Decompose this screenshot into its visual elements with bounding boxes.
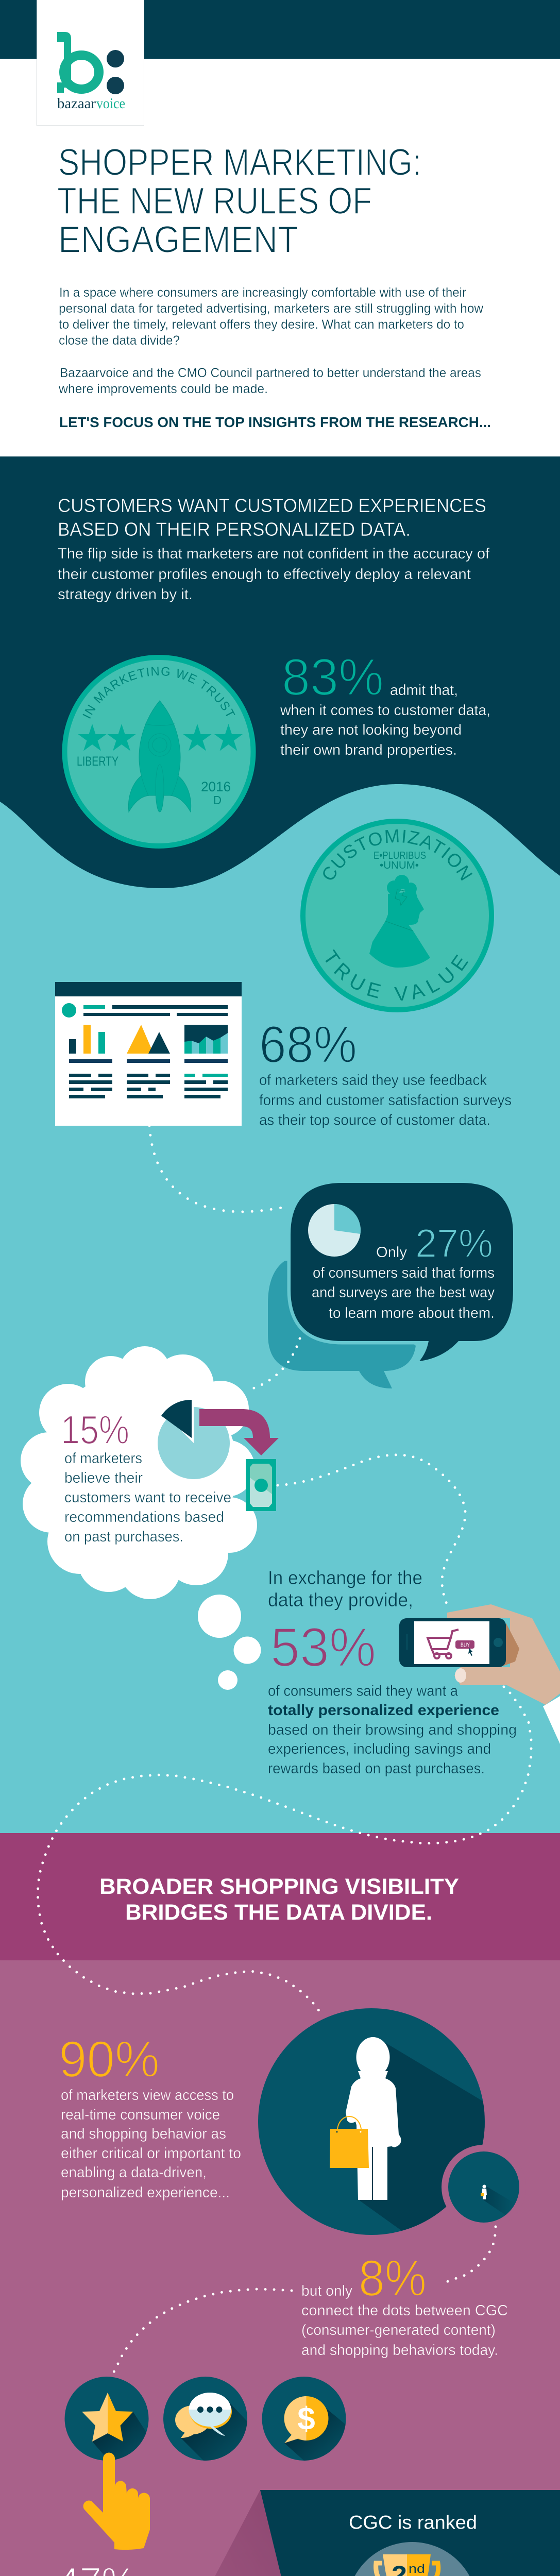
stat: 90%: [59, 2030, 241, 2201]
dotted connector: bubble to cloud: [246, 1338, 300, 1391]
icon: dollar circle: $: [297, 2401, 315, 2437]
icon: coin with rocket: IN MARKETING WE TRUST: [82, 667, 235, 719]
section intro text: their customer profiles enough to effectively deploy a relevant: [58, 566, 471, 583]
pie chart: 15%: [158, 1400, 230, 1479]
panel: purple lower section: [0, 1960, 560, 2576]
cloud puffs: [198, 1595, 261, 1690]
section heading: broader shopping visibility: BROADER SHOPPING VISIBILITY: [99, 1874, 459, 1899]
section heading: customized experiences: BASED ON THEIR PERSONALIZED DATA.: [58, 519, 411, 540]
dotted connector: 8% to star: [112, 2289, 292, 2375]
coin labels: [77, 754, 231, 807]
stat: 90%: either critical or important to: [61, 2145, 241, 2162]
stat: 53%: rewards based on past purchases.: [268, 1760, 485, 1777]
panel: dark section background: [0, 456, 560, 889]
title: ENGAGEMENT: [58, 219, 298, 261]
buy button: BUY: [461, 1641, 470, 1649]
hand: [447, 1604, 560, 1705]
stat: 15%: believe their: [64, 1470, 143, 1486]
stat: 53%: of consumers said they want a: [268, 1683, 459, 1699]
coin labels: LIBERTY: [77, 754, 118, 769]
stat: 8%: 8%: [359, 2249, 427, 2307]
section intro text: strategy driven by it.: [58, 586, 193, 603]
shopping bag: [330, 2116, 369, 2168]
icon: trophy in hand: [354, 2542, 470, 2576]
stat: 90%: 90%: [59, 2030, 160, 2088]
panel: purple heading band: [0, 1833, 560, 1960]
thumb nail: [455, 1668, 466, 1683]
panel: CGC is ranked: CGC is ranked: [349, 2512, 477, 2533]
title: [57, 142, 421, 261]
shopping cart: [428, 1630, 459, 1658]
stat: 53%: experiences, including savings and: [268, 1741, 491, 1757]
stat: 68%: as their top source of customer data.: [259, 1112, 490, 1128]
icon: large shopper circle: [258, 2008, 485, 2235]
shopper silhouette: [346, 2037, 401, 2200]
intro text: In a space where consumers are increasingly comfortable with use of their: [59, 285, 466, 300]
stat: 83%: 83%: [282, 649, 384, 706]
stat: 53%: based on their browsing and shopping: [268, 1722, 517, 1738]
stat: 8%: but only: [301, 2283, 352, 2299]
speech bubble: 27%: to learn more about them.: [329, 1305, 495, 1321]
icon: customization coin: E•PLURIBUS: [374, 850, 426, 861]
icon: trophy in hand: nd: [409, 2562, 425, 2576]
bust portrait: [369, 875, 430, 968]
section heading: broader shopping visibility: BRIDGES THE DATA DIVIDE.: [125, 1900, 432, 1925]
stat: 8%: [301, 2249, 508, 2359]
coin labels: 2016: [201, 779, 231, 794]
intro text: to deliver the timely, relevant offers they desire. What can marketers do to: [59, 317, 464, 332]
icon: bazaarvoice b mark: [57, 32, 124, 94]
stat: 53%: In exchange for the: [268, 1567, 422, 1588]
speech bubble: 27%: Only: [376, 1244, 407, 1261]
mini area chart: [184, 1025, 228, 1054]
logo wordmark: voice: [96, 96, 125, 112]
shirt cuff: [543, 1696, 560, 1744]
icon: customization coin: [300, 819, 494, 1012]
background: white page: [0, 0, 560, 456]
dotted connector: small circle to 8%: [440, 2227, 496, 2283]
intro text: personal data for targeted advertising, marketers are still struggling with how: [59, 301, 484, 316]
stat: 8%: and shopping behaviors today.: [301, 2342, 498, 2359]
icon: pointing hand: [83, 2452, 150, 2550]
stat: 83%: they are not looking beyond: [280, 722, 462, 738]
mini bar chart: [69, 1025, 105, 1054]
intro text: close the data divide?: [59, 333, 180, 348]
dotted connector: dashboard to bubble: [149, 1126, 289, 1212]
stat: 90%: enabling a data-driven,: [61, 2164, 207, 2181]
mini mountain chart: [127, 1025, 170, 1054]
pie chart: 27%: [308, 1204, 361, 1257]
stat: 15%: 15%: [61, 1407, 129, 1452]
logo wordmark: bazaar: [57, 96, 96, 112]
icon: star circle: [65, 2377, 149, 2461]
coin labels: D: [213, 793, 222, 807]
phone: [399, 1618, 506, 1667]
logo wordmark: [57, 96, 125, 112]
icon: customization coin: CUSTOMIZATION: [323, 829, 473, 881]
speech bubble: 27%: 27%: [415, 1221, 493, 1266]
icon: dollar circle: [262, 2377, 346, 2461]
stat: 83%: [280, 649, 490, 758]
icon: dollar bill: [246, 1459, 276, 1511]
stat: 53%: 53%: [270, 1616, 376, 1678]
arrow: wedge to money: [199, 1409, 279, 1455]
speech bubble: 27%: and surveys are the best way: [312, 1284, 495, 1301]
stat: 83%: their own brand properties.: [280, 742, 457, 758]
icon: customization coin: •UNUM•: [380, 860, 419, 871]
stat: 8%: (consumer-generated content): [301, 2322, 496, 2338]
stat: 90%: real-time consumer voice: [61, 2107, 220, 2123]
stat: 90%: of marketers view access to: [61, 2087, 234, 2104]
speech bubble: 27%: of consumers said that forms: [313, 1265, 495, 1281]
header band: [0, 0, 560, 59]
drop shadow behind CGC panel: [93, 2490, 560, 2576]
stat: 83%: when it comes to customer data,: [280, 702, 490, 719]
intro text: Bazaarvoice and the CMO Council partnered to better understand the areas: [60, 366, 481, 380]
stars: [78, 724, 243, 751]
dotted connector: bill to phone: [278, 1455, 465, 1608]
panel: CGC is ranked: [260, 2490, 560, 2576]
panel: light blue wave section: [0, 784, 560, 1833]
stat: 53%: [268, 1567, 517, 1777]
icon: coin with rocket: [62, 655, 256, 849]
thought cloud: [21, 1346, 261, 1690]
speech bubble: back: [268, 1261, 416, 1388]
intro callout: LET'S FOCUS ON THE TOP INSIGHTS FROM THE RESEARCH...: [59, 414, 491, 430]
stat: 8%: connect the dots between CGC: [301, 2302, 508, 2319]
stat: 90%: and shopping behavior as: [61, 2126, 226, 2142]
stat: 68%: of marketers said they use feedback: [259, 1072, 487, 1089]
stat: 15%: [61, 1407, 231, 1545]
stat: 90%: personalized experience...: [61, 2184, 230, 2201]
speech bubble: 27%: [291, 1183, 513, 1361]
stat: 15%: of marketers: [64, 1450, 142, 1467]
icon: customization coin: TRUE VALUE: [326, 949, 468, 1001]
icon: feedback dashboard: [55, 982, 242, 1126]
stat: 68%: 68%: [259, 1016, 357, 1074]
icon: hand holding phone: [399, 1604, 560, 1744]
logo card: [37, 0, 144, 126]
section intro text: The flip side is that marketers are not confident in the accuracy of: [58, 546, 490, 562]
section heading: customized experiences: CUSTOMERS WANT CUSTOMIZED EXPERIENCES: [58, 495, 486, 516]
icon: chat circle: [163, 2377, 247, 2461]
stat: 15%: customers want to receive: [64, 1489, 231, 1506]
title: SHOPPER MARKETING:: [58, 142, 421, 183]
rocket: [128, 701, 191, 812]
stat: 53%: data they provide,: [268, 1589, 413, 1611]
stat: 68%: forms and customer satisfaction surveys: [259, 1092, 512, 1109]
stat: 15%: recommendations based: [64, 1509, 224, 1526]
title: THE NEW RULES OF: [57, 180, 372, 222]
section heading: broader shopping visibility: [99, 1874, 459, 1925]
stat: 68%: [259, 1016, 512, 1128]
icon: small shopper circle: [448, 2151, 519, 2223]
dotted connector: hand looping to shopper: [38, 1687, 531, 2014]
section intro text: [58, 546, 490, 603]
stat: 53%: totally personalized experience: [268, 1702, 499, 1719]
section heading: customized experiences: [58, 495, 486, 540]
stat: 15%: on past purchases.: [64, 1529, 183, 1545]
intro text: [58, 285, 484, 396]
buy button: [455, 1640, 474, 1656]
intro text: where improvements could be made.: [58, 382, 268, 396]
stat: 83%: admit that,: [390, 682, 458, 699]
